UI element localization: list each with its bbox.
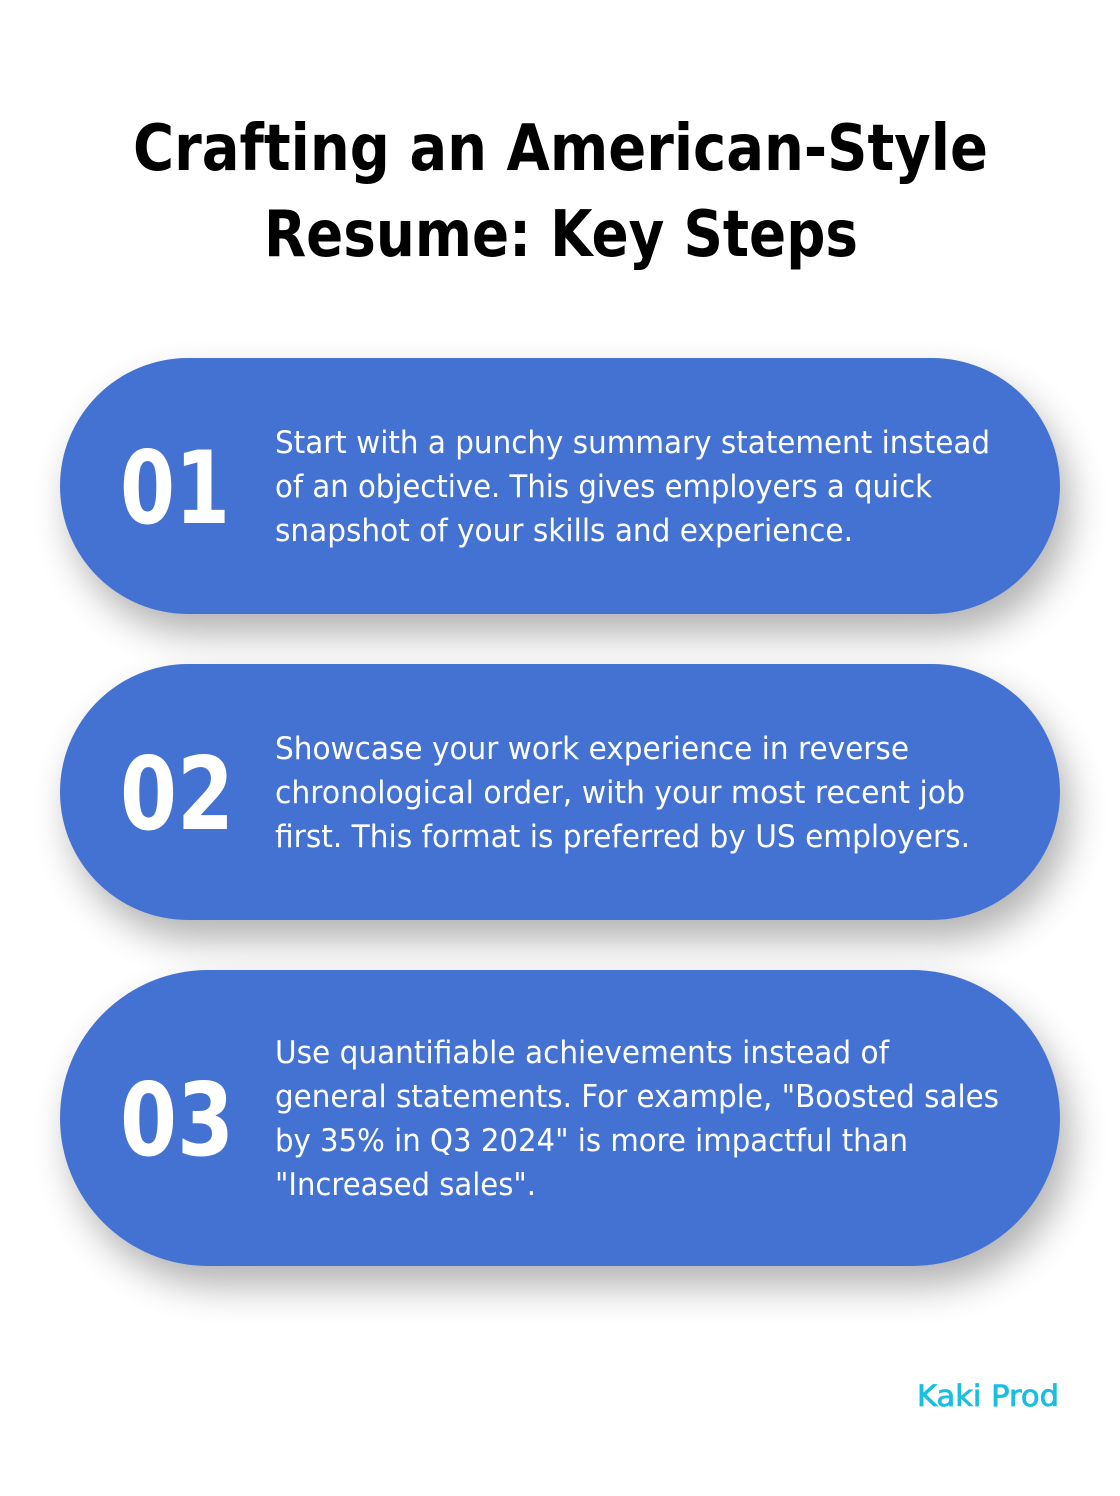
text: step 01 description: of an objective. This gives employers a quick bbox=[275, 469, 933, 505]
title: Crafting an American-Style bbox=[133, 112, 988, 186]
text: step 02 description: chronological order, with your most recent job bbox=[275, 775, 965, 811]
panel: step 03 bbox=[60, 970, 1070, 1286]
text: step 03 description: by 35% in Q3 2024" is more impactful than bbox=[275, 1123, 908, 1159]
text: step 01 description: Start with a punchy summary statement instead bbox=[275, 425, 990, 461]
logo: Kaki Prod: Kaki Prod bbox=[917, 1379, 1059, 1413]
title bbox=[133, 112, 988, 272]
text: step 01 description: snapshot of your skills and experience. bbox=[275, 513, 853, 549]
number 03: 03 bbox=[120, 1061, 234, 1179]
panel: step 02 bbox=[60, 664, 1070, 940]
text: step 01 description bbox=[275, 425, 990, 549]
text: step 03 description: Use quantifiable achievements instead of bbox=[275, 1035, 890, 1071]
text: step 03 description: general statements. For example, "Boosted sales bbox=[275, 1079, 999, 1115]
number 01: 01 bbox=[120, 429, 230, 547]
text: step 02 description: Showcase your work experience in reverse bbox=[275, 731, 909, 767]
panel: step 01 bbox=[60, 358, 1070, 634]
text: step 03 description bbox=[275, 1035, 999, 1203]
title: Resume: Key Steps bbox=[264, 198, 858, 272]
text: step 02 description: first. This format is preferred by US employers. bbox=[275, 819, 970, 855]
number 02: 02 bbox=[120, 735, 234, 853]
text: step 02 description bbox=[275, 731, 970, 855]
text: step 03 description: "Increased sales". bbox=[275, 1167, 536, 1203]
